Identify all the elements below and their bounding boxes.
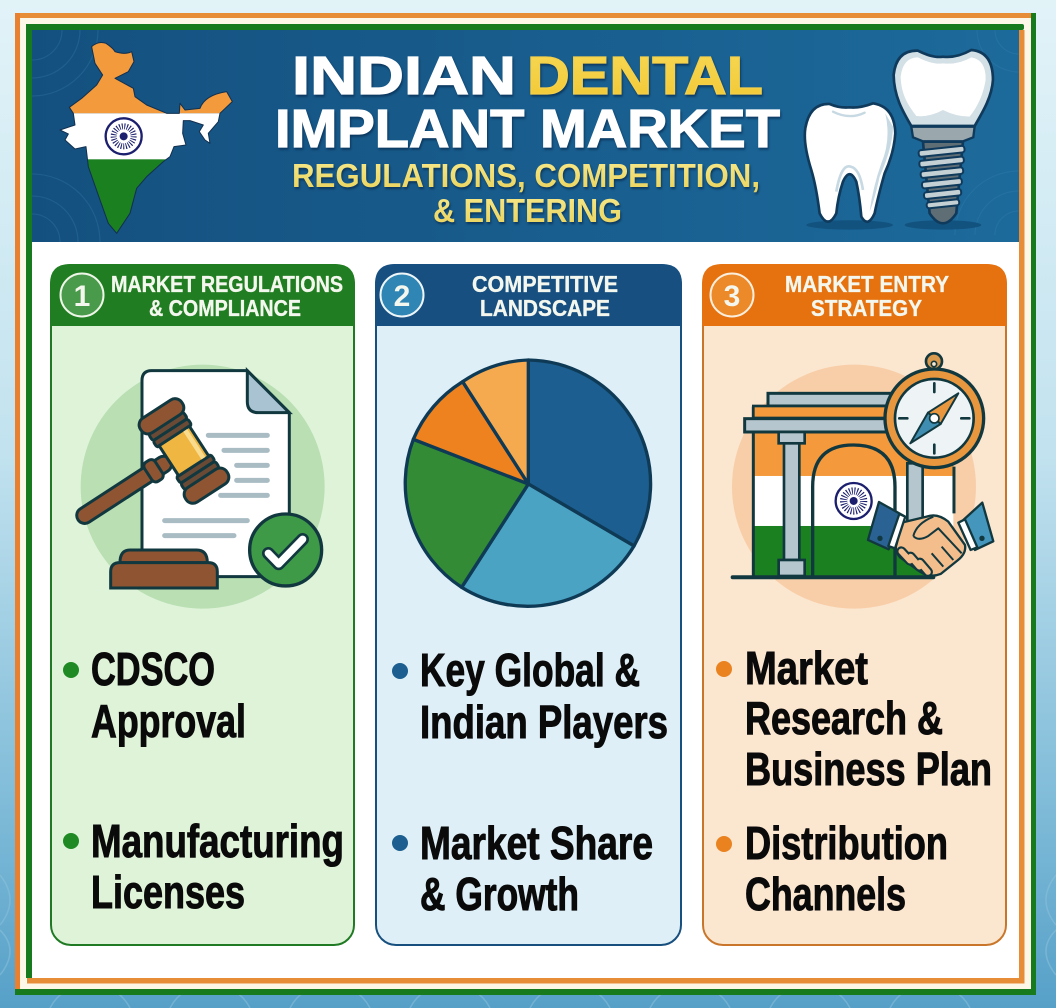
panel: market regulations and compliance [50, 264, 355, 945]
subtitle: REGULATIONS, COMPETITION, [292, 157, 760, 194]
bullet: research and business plan: Business Plan [745, 743, 992, 795]
panel header: regulations [50, 264, 355, 326]
panel header: competitive: COMPETITIVE [472, 271, 618, 297]
icon: Ashoka chakra on map [106, 118, 142, 154]
panel: competitive landscape [375, 264, 682, 945]
panel header: competitive [375, 264, 682, 326]
subtitle: & ENTERING [433, 192, 622, 229]
subtitle [292, 157, 760, 229]
icon: compass [885, 353, 984, 468]
panel: market entry strategy [702, 264, 1007, 945]
icon: flag gateway, compass and handshake [732, 353, 993, 609]
icon: natural tooth [805, 103, 895, 230]
panel header: competitive: 2 [394, 280, 410, 313]
bullet: CDSCO approval: CDSCO [91, 643, 215, 695]
title [275, 46, 780, 159]
bullet: distribution channels: Distribution [745, 817, 948, 869]
bullet: research and business plan: Market [745, 642, 868, 694]
bullet: manufacturing licenses [63, 815, 344, 918]
icon: India map in flag colours [57, 37, 237, 239]
bullet: key players: Key Global & [420, 644, 640, 696]
title: INDIAN [292, 46, 516, 106]
bullet: CDSCO approval [63, 643, 246, 747]
bullet: research and business plan [716, 642, 992, 795]
bullet: market share [392, 817, 653, 920]
icon: handshake [868, 502, 993, 576]
panel header: entry: MARKET ENTRY [785, 271, 949, 297]
bullet: market share: Market Share [420, 817, 653, 869]
bullet: manufacturing licenses: Manufacturing [91, 815, 344, 867]
bullet: market share: & Growth [420, 868, 579, 920]
bullet: manufacturing licenses: Licenses [91, 866, 245, 918]
header banner [32, 30, 1019, 242]
panel header: regulations: MARKET REGULATIONS [111, 271, 343, 297]
bullet: research and business plan: Research & [745, 692, 943, 744]
panel header: entry: 3 [724, 280, 740, 313]
title: DENTAL [527, 46, 763, 106]
icon: gavel and approved document [51, 365, 325, 609]
pie chart: market share [405, 360, 651, 606]
panel header: regulations: 1 [74, 280, 90, 313]
icon: dental implant [894, 50, 993, 230]
panel header: entry [702, 264, 1007, 326]
panel header: entry: STRATEGY [811, 295, 922, 321]
bullet: key players [392, 644, 668, 748]
icon: chakra on gate [836, 483, 872, 519]
bullet: distribution channels: Channels [745, 868, 906, 920]
panel header: regulations: & COMPLIANCE [149, 295, 301, 321]
bullet: key players: Indian Players [420, 696, 668, 748]
panel header: competitive: LANDSCAPE [480, 295, 610, 321]
bullet: distribution channels [716, 817, 948, 920]
bullet: CDSCO approval: Approval [91, 695, 246, 747]
title: IMPLANT MARKET [275, 99, 780, 159]
